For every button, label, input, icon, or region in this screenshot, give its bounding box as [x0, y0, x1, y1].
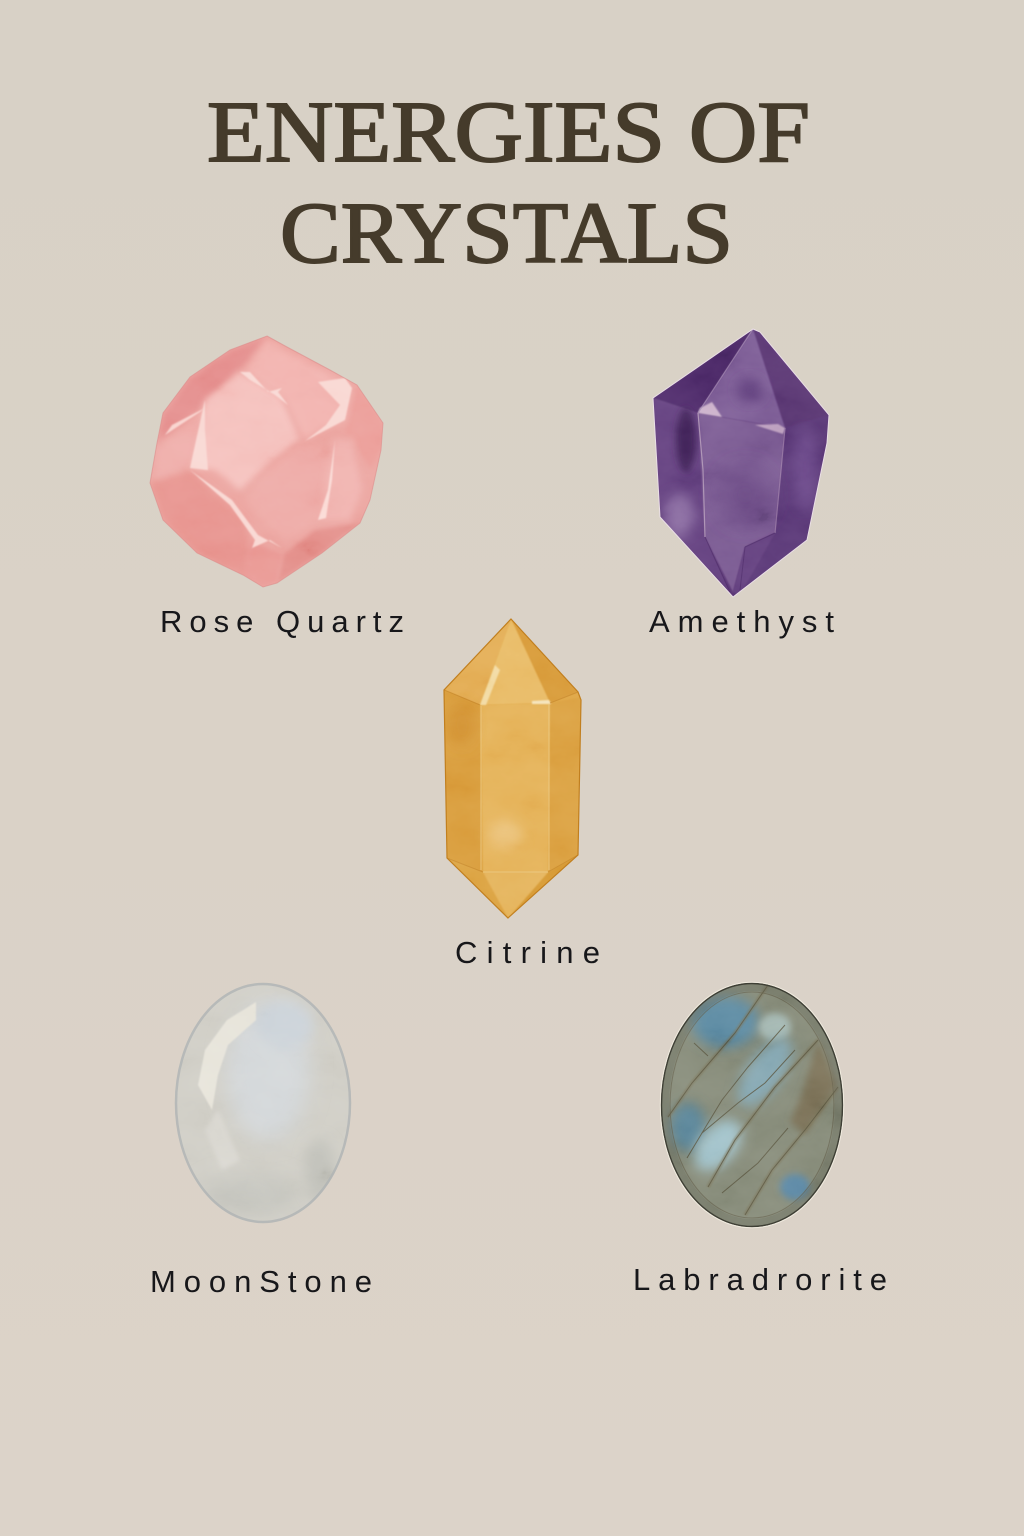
icon: citrine: [440, 615, 585, 920]
icon: labradorite: [655, 978, 850, 1233]
label: Rose Quartz: Rose Quartz: [160, 604, 404, 639]
title: [207, 83, 810, 281]
title: CRYSTALS: [280, 184, 733, 281]
icon: moonstone: [170, 978, 356, 1228]
label: Amethyst: Amethyst: [649, 604, 834, 639]
title: ENERGIES OF: [207, 83, 810, 180]
label: MoonStone: MoonStone: [150, 1264, 372, 1299]
icon: amethyst: [645, 325, 835, 600]
label: Citrine: Citrine: [455, 935, 600, 970]
icon: rose quartz: [150, 336, 384, 588]
label: Labradorite: Labradrorite: [633, 1262, 887, 1297]
